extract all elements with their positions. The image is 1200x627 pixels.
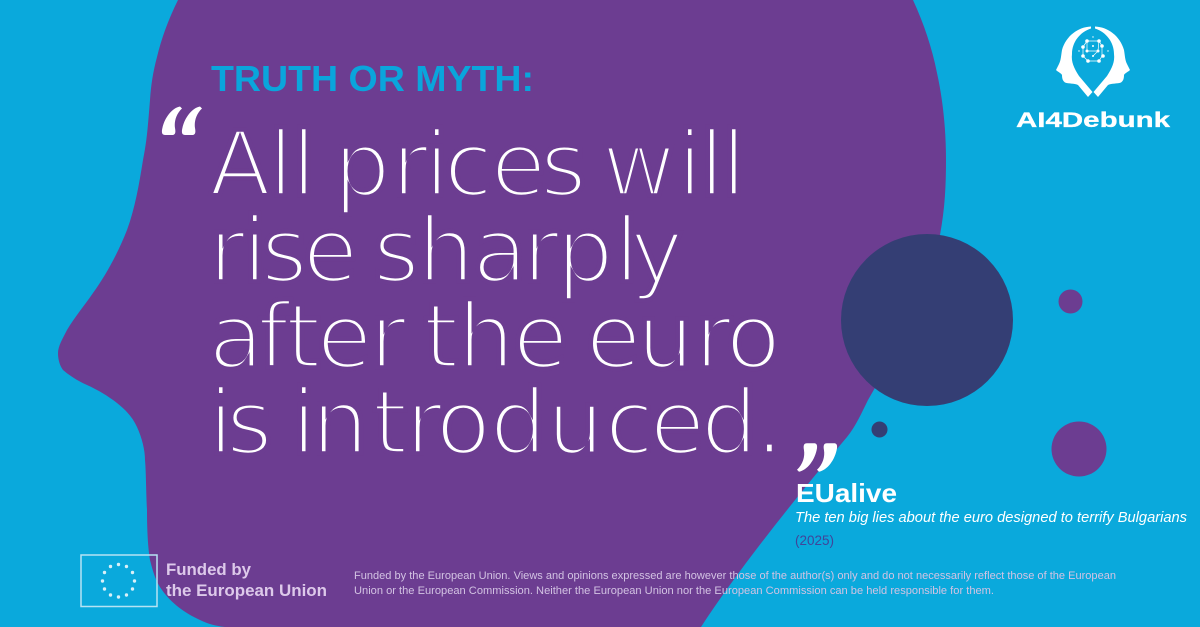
EU stars bbox=[101, 563, 136, 599]
logo: AI4Debunk bbox=[1016, 26, 1170, 132]
large navy circle bbox=[841, 234, 1013, 406]
disclaimer text: Funded by the European Union. Views and opinions expressed are however those of the author(s) only and do not necessarily reflect those of the European bbox=[354, 570, 1116, 582]
disclaimer text: Union or the European Commission. Neither the European Union nor the European Commission can be held responsible for them. bbox=[354, 585, 994, 597]
quote text: euro bbox=[586, 284, 781, 390]
quote text bbox=[208, 112, 784, 476]
quote text: is bbox=[208, 370, 273, 476]
quote text: rise bbox=[208, 198, 358, 304]
quote text: introduced. bbox=[291, 370, 784, 476]
funded by label: the European Union bbox=[166, 582, 327, 600]
quote text: sharply bbox=[373, 198, 683, 304]
purple head silhouette bbox=[58, 0, 946, 627]
quote text: All bbox=[209, 112, 316, 218]
opening quotation mark bbox=[162, 106, 202, 135]
logo wordmark: AI4Debunk bbox=[1016, 109, 1170, 132]
EU funding badge bbox=[81, 555, 327, 606]
small navy circle bbox=[872, 422, 888, 438]
source name: EUalive bbox=[796, 478, 897, 508]
source title: The ten big lies about the euro designed to terrify Bulgarians bbox=[795, 510, 1187, 526]
heading: TRUTH OR MYTH: bbox=[211, 58, 534, 99]
medium purple circle bbox=[1052, 422, 1106, 476]
quote text: the bbox=[423, 284, 568, 390]
funded by label: Funded by bbox=[166, 561, 252, 579]
closing quotation mark bbox=[797, 443, 837, 472]
quote text: prices bbox=[334, 112, 587, 218]
quote text: after bbox=[208, 284, 407, 390]
small purple circle bbox=[1058, 290, 1082, 314]
quote text: will bbox=[602, 112, 746, 218]
icon: two heads with network bbox=[1056, 26, 1130, 97]
EU flag outline bbox=[81, 555, 157, 606]
source year: (2025) bbox=[795, 533, 834, 548]
